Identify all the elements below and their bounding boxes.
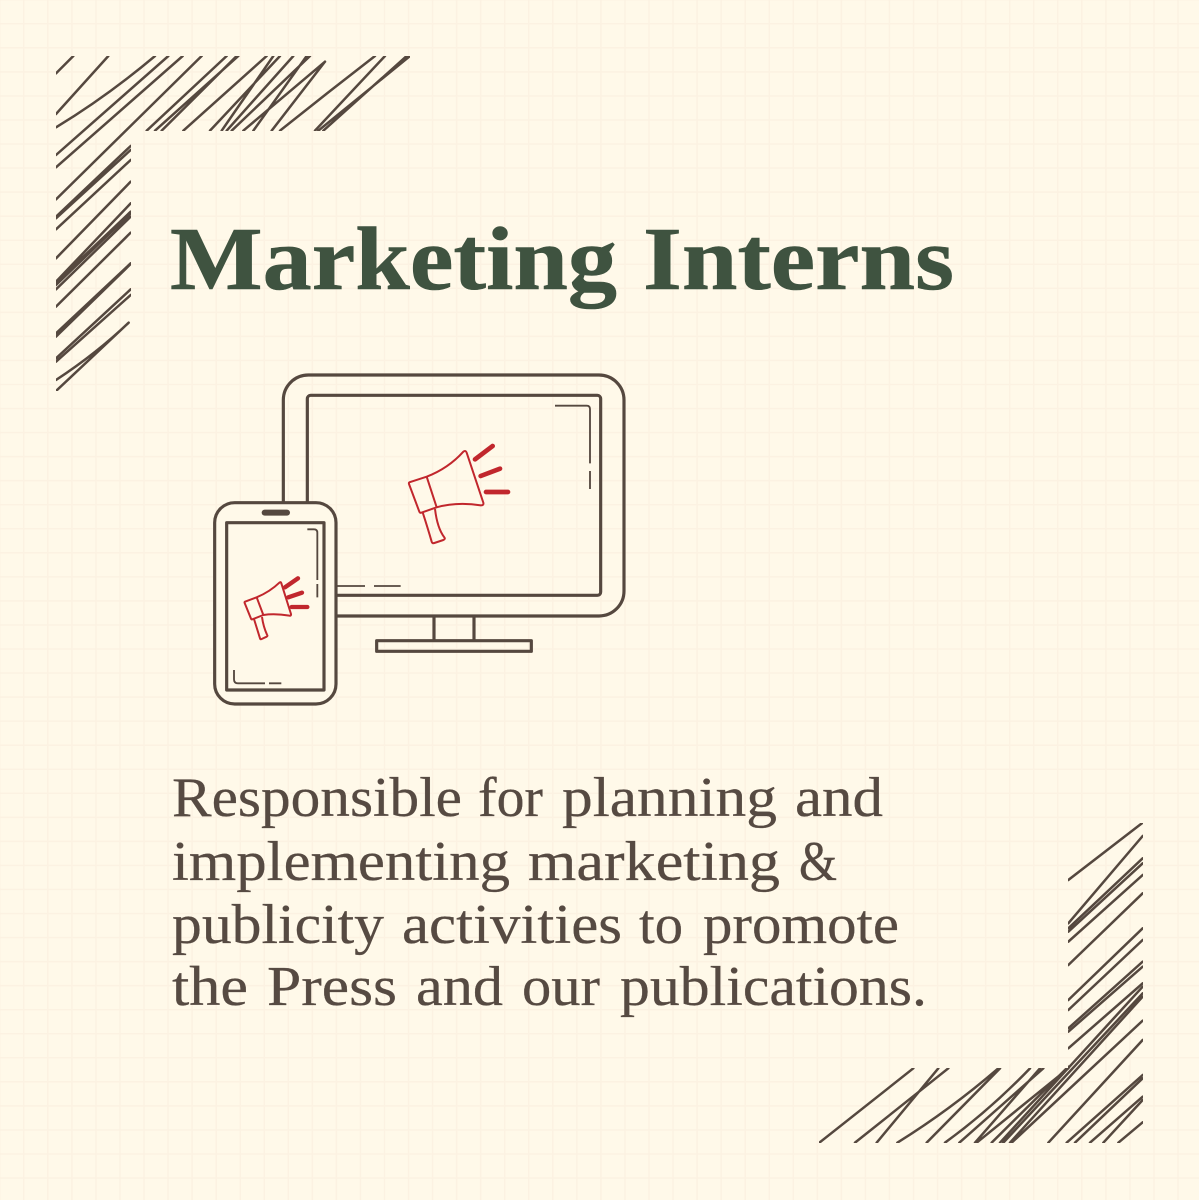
description text: for bbox=[478, 767, 543, 829]
icon: large megaphone bbox=[409, 446, 508, 543]
description text bbox=[172, 767, 927, 1018]
desktop highlight dashes bbox=[337, 583, 401, 589]
description text: activities bbox=[402, 894, 622, 956]
icon: phone bbox=[215, 503, 336, 704]
title: Marketing bbox=[170, 210, 617, 309]
description text: Press bbox=[267, 956, 397, 1018]
title: Interns bbox=[643, 210, 954, 309]
description text: to bbox=[639, 894, 683, 956]
icon: monitor and phone with megaphones bbox=[215, 375, 624, 704]
hatched corner frame: top left bbox=[56, 56, 410, 391]
description text: promote bbox=[703, 894, 899, 956]
description text: & bbox=[799, 831, 837, 893]
icon: small megaphone bbox=[245, 578, 307, 639]
title bbox=[170, 210, 954, 309]
description text: planning bbox=[562, 767, 777, 829]
hatched corner frame: bottom right bbox=[819, 823, 1143, 1143]
description text: publications. bbox=[620, 956, 927, 1018]
description text: our bbox=[522, 956, 600, 1018]
description text: implementing bbox=[172, 831, 510, 893]
description text: and bbox=[795, 767, 883, 829]
description text: Responsible bbox=[172, 767, 462, 829]
description text: and bbox=[416, 956, 503, 1018]
description text: publicity bbox=[172, 894, 384, 956]
description text: marketing bbox=[528, 831, 780, 893]
description text: the bbox=[172, 956, 248, 1018]
icon: desktop monitor bbox=[283, 375, 624, 651]
